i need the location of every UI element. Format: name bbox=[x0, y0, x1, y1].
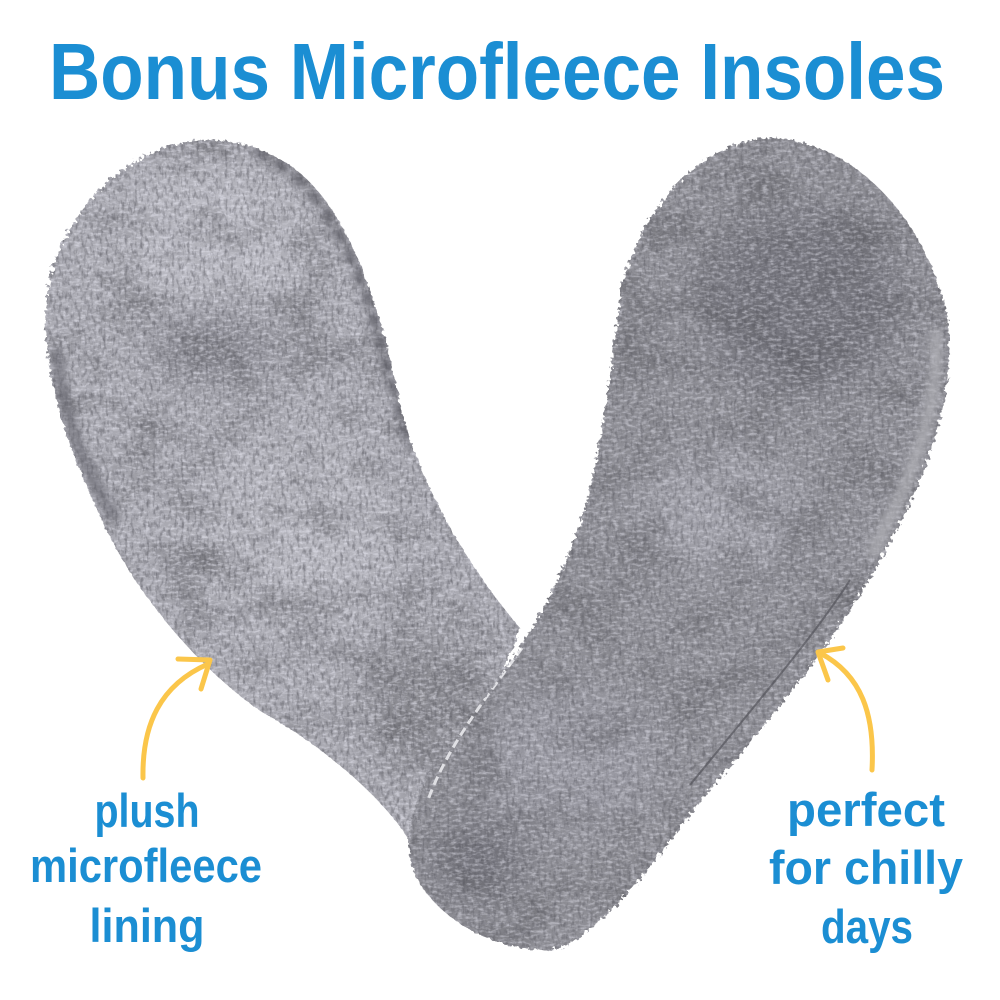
dark seam bbox=[690, 580, 850, 785]
callout: plush microfleece lining: plush bbox=[94, 784, 200, 837]
arrow: to right insole bbox=[818, 648, 872, 770]
callout: plush microfleece lining: microfleece bbox=[30, 839, 262, 892]
pale seam bbox=[428, 648, 522, 800]
tonal patches bbox=[435, 210, 900, 900]
left insole bbox=[44, 138, 520, 839]
right insole bbox=[390, 125, 965, 960]
tonal patches bbox=[115, 180, 480, 770]
callout: perfect for chilly days bbox=[769, 783, 963, 953]
callout: perfect for chilly days: perfect bbox=[787, 783, 945, 836]
callout: perfect for chilly days: days bbox=[821, 900, 913, 953]
pale outer rim bbox=[871, 330, 937, 555]
arrow: to left insole bbox=[143, 659, 210, 778]
callout: plush microfleece lining bbox=[30, 784, 262, 952]
dark stitched edge bbox=[255, 150, 412, 450]
callout: plush microfleece lining: lining bbox=[90, 899, 204, 952]
callout: perfect for chilly days: for chilly bbox=[769, 841, 963, 894]
